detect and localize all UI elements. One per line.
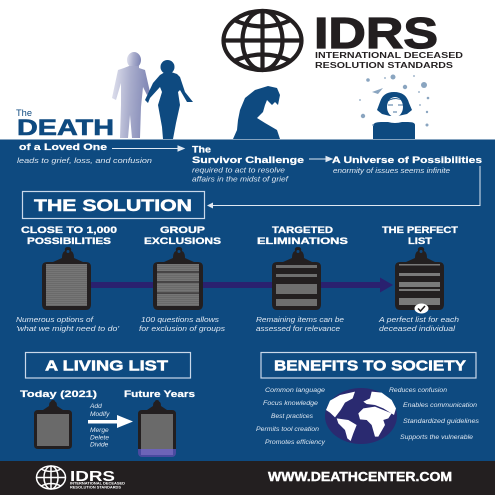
- step heading: targeted eliminations: ELIMINATIONS: [257, 236, 349, 247]
- caption: 100 questions: for exclusion of groups: [139, 324, 225, 333]
- caption: perfect list: [378, 315, 459, 333]
- text block: merge delete divide: Delete: [90, 434, 109, 442]
- logo: IDRS wordmark: IDRS: [314, 9, 438, 58]
- text block: a universe of possibilities: enormity of issues seems infinite: [333, 166, 450, 175]
- caption: remaining items: assessed for relevance: [256, 324, 340, 333]
- caption: numerous options: [16, 315, 120, 333]
- footer: website url: WWW.DEATHCENTER.COM: [268, 469, 452, 484]
- text block: a universe of possibilities: [332, 155, 482, 175]
- illustration: man fading silhouette: [112, 52, 150, 138]
- caption: remaining items: Remaining items can be: [256, 315, 344, 324]
- step heading: group exclusions: EXCLUSIONS: [144, 236, 222, 247]
- list: benefits left: Common language: [265, 387, 325, 394]
- text block: merge delete divide: Divide: [90, 442, 109, 448]
- heading: the solution: [22, 192, 204, 218]
- list: benefits left: [256, 387, 326, 446]
- arrow: survivor challenge to universe: [309, 156, 332, 162]
- logo: footer wordmark: IDRS: [70, 468, 115, 485]
- label: today 2021: Today (2021): [20, 389, 97, 400]
- caption: numerous options: Numerous options of: [16, 315, 94, 324]
- panel: blue background band: [0, 140, 495, 462]
- logo: footer wordmark: RESOLUTION STANDARDS: [70, 486, 121, 490]
- list: benefits right: Reduces confusion: [389, 387, 447, 394]
- text block: the death of a loved one: [16, 108, 152, 165]
- step heading: targeted eliminations: TARGETED: [272, 225, 333, 236]
- caption: remaining items: [256, 315, 344, 333]
- text block: a universe of possibilities: A Universe of Possibilities: [332, 155, 482, 166]
- text block: survivor challenge: The: [192, 144, 211, 156]
- heading: benefits to society: [261, 352, 476, 378]
- text block: the death of a loved one: The: [16, 108, 32, 118]
- heading: a living list: [26, 352, 190, 378]
- clipboard: group exclusions: [153, 247, 203, 310]
- step heading: the perfect list: [382, 225, 458, 247]
- step heading: close to 1,000 possibilities: [21, 225, 117, 247]
- caption: perfect list: A perfect list for each: [378, 315, 459, 324]
- list: benefits left: Promotes efficiency: [265, 439, 326, 446]
- text block: merge delete divide: Merge: [90, 427, 109, 434]
- text block: add modify: [89, 403, 110, 418]
- panel: black footer: [0, 461, 495, 495]
- illustration: woman silhouette: [145, 60, 193, 139]
- step heading: group exclusions: [144, 225, 222, 247]
- heading: the solution: THE SOLUTION: [34, 197, 192, 215]
- arrow: universe back to the solution: [207, 166, 480, 208]
- step heading: close to 1,000 possibilities: POSSIBILITIES: [27, 236, 112, 247]
- logo: IDRS wordmark: INTERNATIONAL DECEASED: [315, 50, 463, 60]
- logo: footer wordmark: [70, 468, 126, 490]
- logo: footer globe: [36, 466, 66, 489]
- list: benefits right: [389, 387, 480, 441]
- text block: survivor challenge: required to act to resolve: [192, 166, 285, 174]
- clipboard: targeted eliminations: [272, 247, 321, 310]
- arrow: living list change: [88, 415, 133, 428]
- heading: benefits to society: BENEFITS TO SOCIETY: [274, 358, 466, 374]
- illustration: grieving kneeling figure: [233, 86, 280, 139]
- text block: survivor challenge: Survivor Challenge: [192, 155, 304, 166]
- text block: merge delete divide: [90, 427, 109, 448]
- list: benefits left: Permits tool creation: [256, 426, 319, 433]
- list: benefits right: Supports the vulnerable: [400, 434, 473, 441]
- step heading: close to 1,000 possibilities: CLOSE TO 1,000: [21, 225, 117, 236]
- step heading: the perfect list: THE PERFECT: [382, 225, 458, 236]
- text block: add modify: Modify: [90, 411, 110, 418]
- illustration: woman with swirling thoughts: [359, 74, 429, 139]
- list: benefits left: Best practices: [271, 413, 314, 420]
- step heading: targeted eliminations: [257, 225, 349, 247]
- logo: IDRS wordmark: RESOLUTION STANDARDS: [315, 60, 453, 70]
- clipboard: future with extension: [138, 400, 176, 457]
- caption: 100 questions: [139, 315, 225, 333]
- list: benefits right: Enables communication: [403, 402, 477, 409]
- arrow: death to survivor challenge: [112, 146, 184, 151]
- text block: add modify: Add: [89, 403, 102, 410]
- arrow: purple progress line: [91, 278, 393, 292]
- caption: perfect list: deceased individual: [379, 324, 455, 333]
- step heading: group exclusions: GROUP: [160, 225, 206, 236]
- icon: world globe: [325, 388, 397, 444]
- clipboard: all possibilities: [42, 247, 91, 310]
- caption: 100 questions: 100 questions allows: [141, 315, 219, 324]
- text block: survivor challenge: [192, 144, 304, 184]
- list: benefits right: Standardized guidelines: [403, 418, 480, 425]
- logo: IDRS wordmark: [314, 9, 463, 70]
- icon: check mark: [414, 304, 428, 314]
- text block: the death of a loved one: of a Loved One: [19, 142, 107, 153]
- caption: numerous options: 'what we might need to do': [16, 324, 120, 333]
- clipboard: the perfect list: [395, 247, 444, 310]
- text block: the death of a loved one: DEATH: [17, 115, 114, 140]
- clipboard: today: [34, 400, 72, 449]
- step heading: the perfect list: LIST: [408, 236, 432, 247]
- text block: the death of a loved one: leads to grief, loss, and confusion: [17, 156, 152, 165]
- label: future years: Future Years: [124, 389, 195, 400]
- list: benefits left: Focus knowledge: [263, 400, 318, 407]
- logo: IDRS globe: [223, 11, 302, 70]
- logo: footer wordmark: INTERNATIONAL DECEASED: [70, 482, 126, 486]
- heading: a living list: A LIVING LIST: [45, 358, 168, 374]
- text block: survivor challenge: affairs in the midst of grief: [192, 174, 289, 184]
